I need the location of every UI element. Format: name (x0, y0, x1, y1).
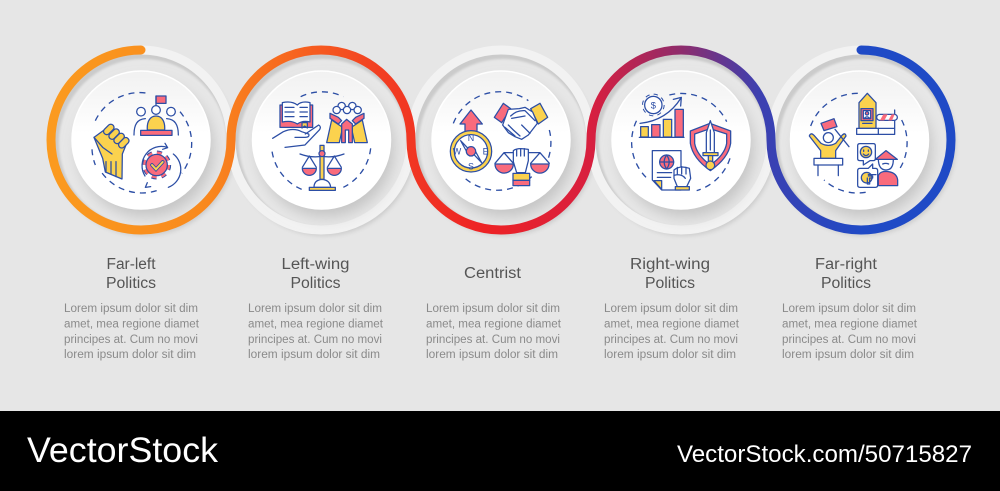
serpentine gradient ribbon (51, 50, 951, 230)
column 4 body text: lorem ipsum dolor sit dim (604, 349, 736, 361)
icon: right-wing politics (632, 93, 731, 191)
column 1 body text (64, 303, 200, 361)
column 5 body text: principes at. Cum no movi (782, 334, 916, 346)
column 1 title: Politics (106, 275, 156, 292)
icon: right-wing politics: $ (651, 100, 657, 110)
icon: centrist: W (453, 147, 462, 157)
footer band (0, 411, 1000, 491)
icon: far-right politics (809, 93, 907, 193)
column 4 body text: Lorem ipsum dolor sit dim (604, 303, 738, 315)
icon: far-left politics (92, 93, 192, 193)
column 2 body text: lorem ipsum dolor sit dim (248, 349, 380, 361)
icon: centrist: E (483, 147, 489, 157)
column 4 title: Right-wing (630, 256, 710, 273)
column 1 body text: lorem ipsum dolor sit dim (64, 349, 196, 361)
column 2 body text (248, 303, 384, 361)
column 2 body text: amet, mea regione diamet (248, 318, 384, 330)
column 3 body text: amet, mea regione diamet (426, 318, 562, 330)
column 3 body text (426, 303, 562, 361)
column 2 title: Politics (290, 275, 341, 292)
column 2 body text: principes at. Cum no movi (248, 334, 382, 346)
pale unfilled ring arcs (141, 50, 861, 230)
column 3 body text: principes at. Cum no movi (426, 334, 560, 346)
column 4 body text: principes at. Cum no movi (604, 334, 738, 346)
inner recessed discs (55, 54, 947, 227)
column 1 body text: Lorem ipsum dolor sit dim (64, 303, 198, 315)
icon: centrist: N (468, 133, 474, 143)
column 4 title: Politics (645, 275, 695, 292)
footer brand: VectorStock (27, 431, 219, 470)
column 5 title: Far-right (815, 256, 878, 273)
disc drop shadows (78, 81, 932, 217)
icon: centrist: S (468, 162, 474, 172)
column 5 body text: amet, mea regione diamet (782, 318, 918, 330)
column 1 title: Far-left (106, 256, 156, 273)
column 1 body text: amet, mea regione diamet (64, 318, 200, 330)
ring shadows (52, 52, 956, 236)
column 3 title: Centrist (464, 265, 522, 282)
column 3 body text: lorem ipsum dolor sit dim (426, 349, 558, 361)
icon: left-wing politics (272, 92, 371, 190)
column 2 title: Left-wing (282, 256, 350, 273)
column 1 body text: principes at. Cum no movi (64, 334, 198, 346)
column 5 title: Politics (821, 275, 871, 292)
column 5 body text: Lorem ipsum dolor sit dim (782, 303, 916, 315)
column 5 body text (782, 303, 918, 361)
footer image id: VectorStock.com/50715827 (677, 441, 972, 468)
icon: centrist (450, 92, 551, 190)
column 3 body text: Lorem ipsum dolor sit dim (426, 303, 560, 315)
column 2 body text: Lorem ipsum dolor sit dim (248, 303, 382, 315)
white discs (72, 71, 928, 209)
column 4 body text: amet, mea regione diamet (604, 318, 740, 330)
column 5 body text: lorem ipsum dolor sit dim (782, 349, 914, 361)
column 4 body text (604, 303, 740, 361)
